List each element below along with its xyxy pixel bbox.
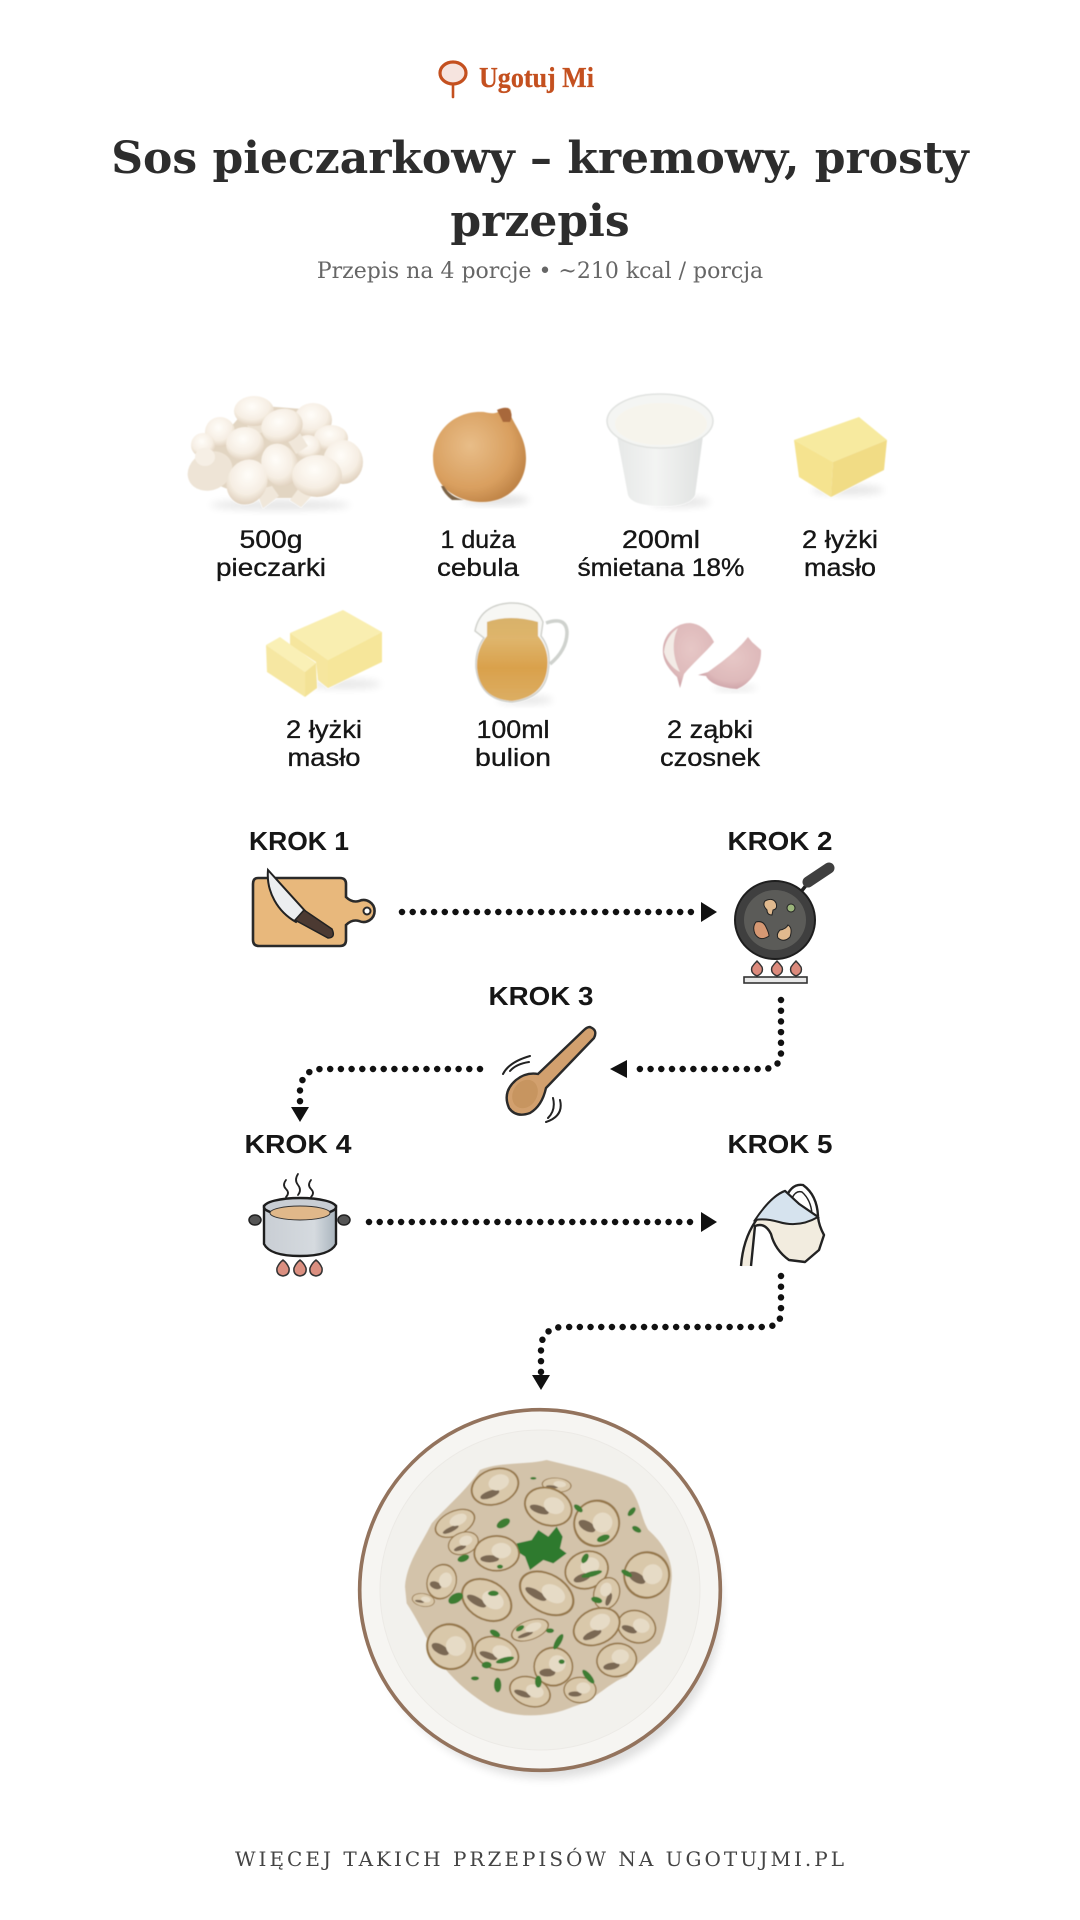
arrow: step 5 to plate bbox=[532, 1276, 781, 1390]
icon: pouring jug bbox=[741, 1185, 824, 1266]
icon: wooden spoon bbox=[503, 1027, 595, 1122]
arrow: step 2 to 3 bbox=[610, 1000, 781, 1078]
ingredient label: 1 duza cebula: cebula bbox=[437, 554, 519, 582]
arrow: step 4 to 5 bbox=[369, 1212, 717, 1232]
ingredient label: 200ml smietana: 200ml bbox=[622, 526, 700, 554]
footer: WIĘCEJ TAKICH PRZEPISÓW NA UGOTUJMI.PL bbox=[235, 1846, 847, 1871]
ingredient label: 100ml bulion: 100ml bbox=[476, 716, 550, 744]
icon: steaming pot bbox=[249, 1174, 350, 1276]
heading: KROK 2: KROK 2 bbox=[728, 826, 832, 856]
parsley flecks bbox=[446, 1477, 642, 1692]
subtitle: Przepis na 4 porcje • ~210 kcal / porcja bbox=[317, 259, 763, 284]
heading: KROK 4: KROK 4 bbox=[244, 1129, 352, 1159]
title: Sos pieczarkowy – kremowy, prosty bbox=[111, 133, 970, 184]
mushroom slices bbox=[411, 1461, 679, 1713]
ingredient label: 2 zabki czosnek: czosnek bbox=[660, 744, 761, 772]
heading: KROK 5: KROK 5 bbox=[728, 1129, 832, 1159]
logo wordmark: Ugotuj Mi bbox=[479, 63, 594, 94]
ingredient label: 2 lyzki maslo: 2 łyżki bbox=[802, 526, 878, 554]
ingredient label: 2 lyzki maslo (second): masło bbox=[288, 744, 360, 772]
final dish: plate of mushroom sauce bbox=[360, 1410, 722, 1778]
icon: spoon pin bbox=[440, 62, 466, 97]
parsley leaf bbox=[517, 1527, 567, 1570]
ingredient label: 500g pieczarki: 500g bbox=[240, 526, 302, 554]
ingredient: garlic bbox=[663, 623, 761, 691]
arrow: step 1 to 2 bbox=[402, 902, 717, 922]
ingredient label: 500g pieczarki bbox=[216, 526, 326, 582]
ingredient: cream cup bbox=[607, 394, 713, 507]
ingredient label: 2 lyzki maslo (second): 2 łyżki bbox=[286, 716, 362, 744]
ingredient label: 1 duza cebula bbox=[437, 526, 519, 582]
title: przepis bbox=[450, 196, 630, 247]
plate bbox=[360, 1410, 722, 1778]
ingredient label: 2 lyzki maslo: masło bbox=[804, 554, 876, 582]
ingredient label: 2 zabki czosnek: 2 ząbki bbox=[667, 716, 753, 744]
ingredient label: 2 lyzki maslo (second) bbox=[286, 716, 362, 772]
panel: steps bbox=[244, 826, 832, 1390]
heading: KROK 3: KROK 3 bbox=[488, 981, 594, 1011]
sauce bbox=[405, 1460, 672, 1715]
logo: Ugotuj Mi bbox=[440, 62, 594, 97]
ingredient label: 200ml smietana bbox=[578, 526, 744, 582]
sauce and mushrooms bbox=[405, 1460, 679, 1715]
arrow: step 3 to 4 bbox=[291, 1069, 480, 1122]
ingredient label: 200ml smietana: śmietana 18% bbox=[578, 554, 744, 582]
icon: cutting board with knife bbox=[253, 870, 375, 946]
ingredient label: 2 zabki czosnek bbox=[660, 716, 761, 772]
ingredient: butter bbox=[794, 417, 887, 497]
panel: ingredients bbox=[181, 394, 887, 772]
ingredient: broth jug bbox=[475, 603, 567, 704]
ingredient label: 1 duza cebula: 1 duża bbox=[440, 526, 516, 554]
ingredient: onion bbox=[433, 408, 529, 505]
ingredient label: 2 lyzki maslo bbox=[802, 526, 878, 582]
ingredient label: 500g pieczarki: pieczarki bbox=[216, 554, 326, 582]
heading: KROK 1: KROK 1 bbox=[249, 826, 349, 856]
ingredient label: 100ml bulion bbox=[475, 716, 551, 772]
ingredient: butter block sliced bbox=[266, 610, 382, 697]
ingredient label: 100ml bulion: bulion bbox=[475, 744, 551, 772]
ingredient: mushrooms bbox=[181, 396, 363, 511]
icon: frying pan on burner bbox=[735, 868, 829, 983]
